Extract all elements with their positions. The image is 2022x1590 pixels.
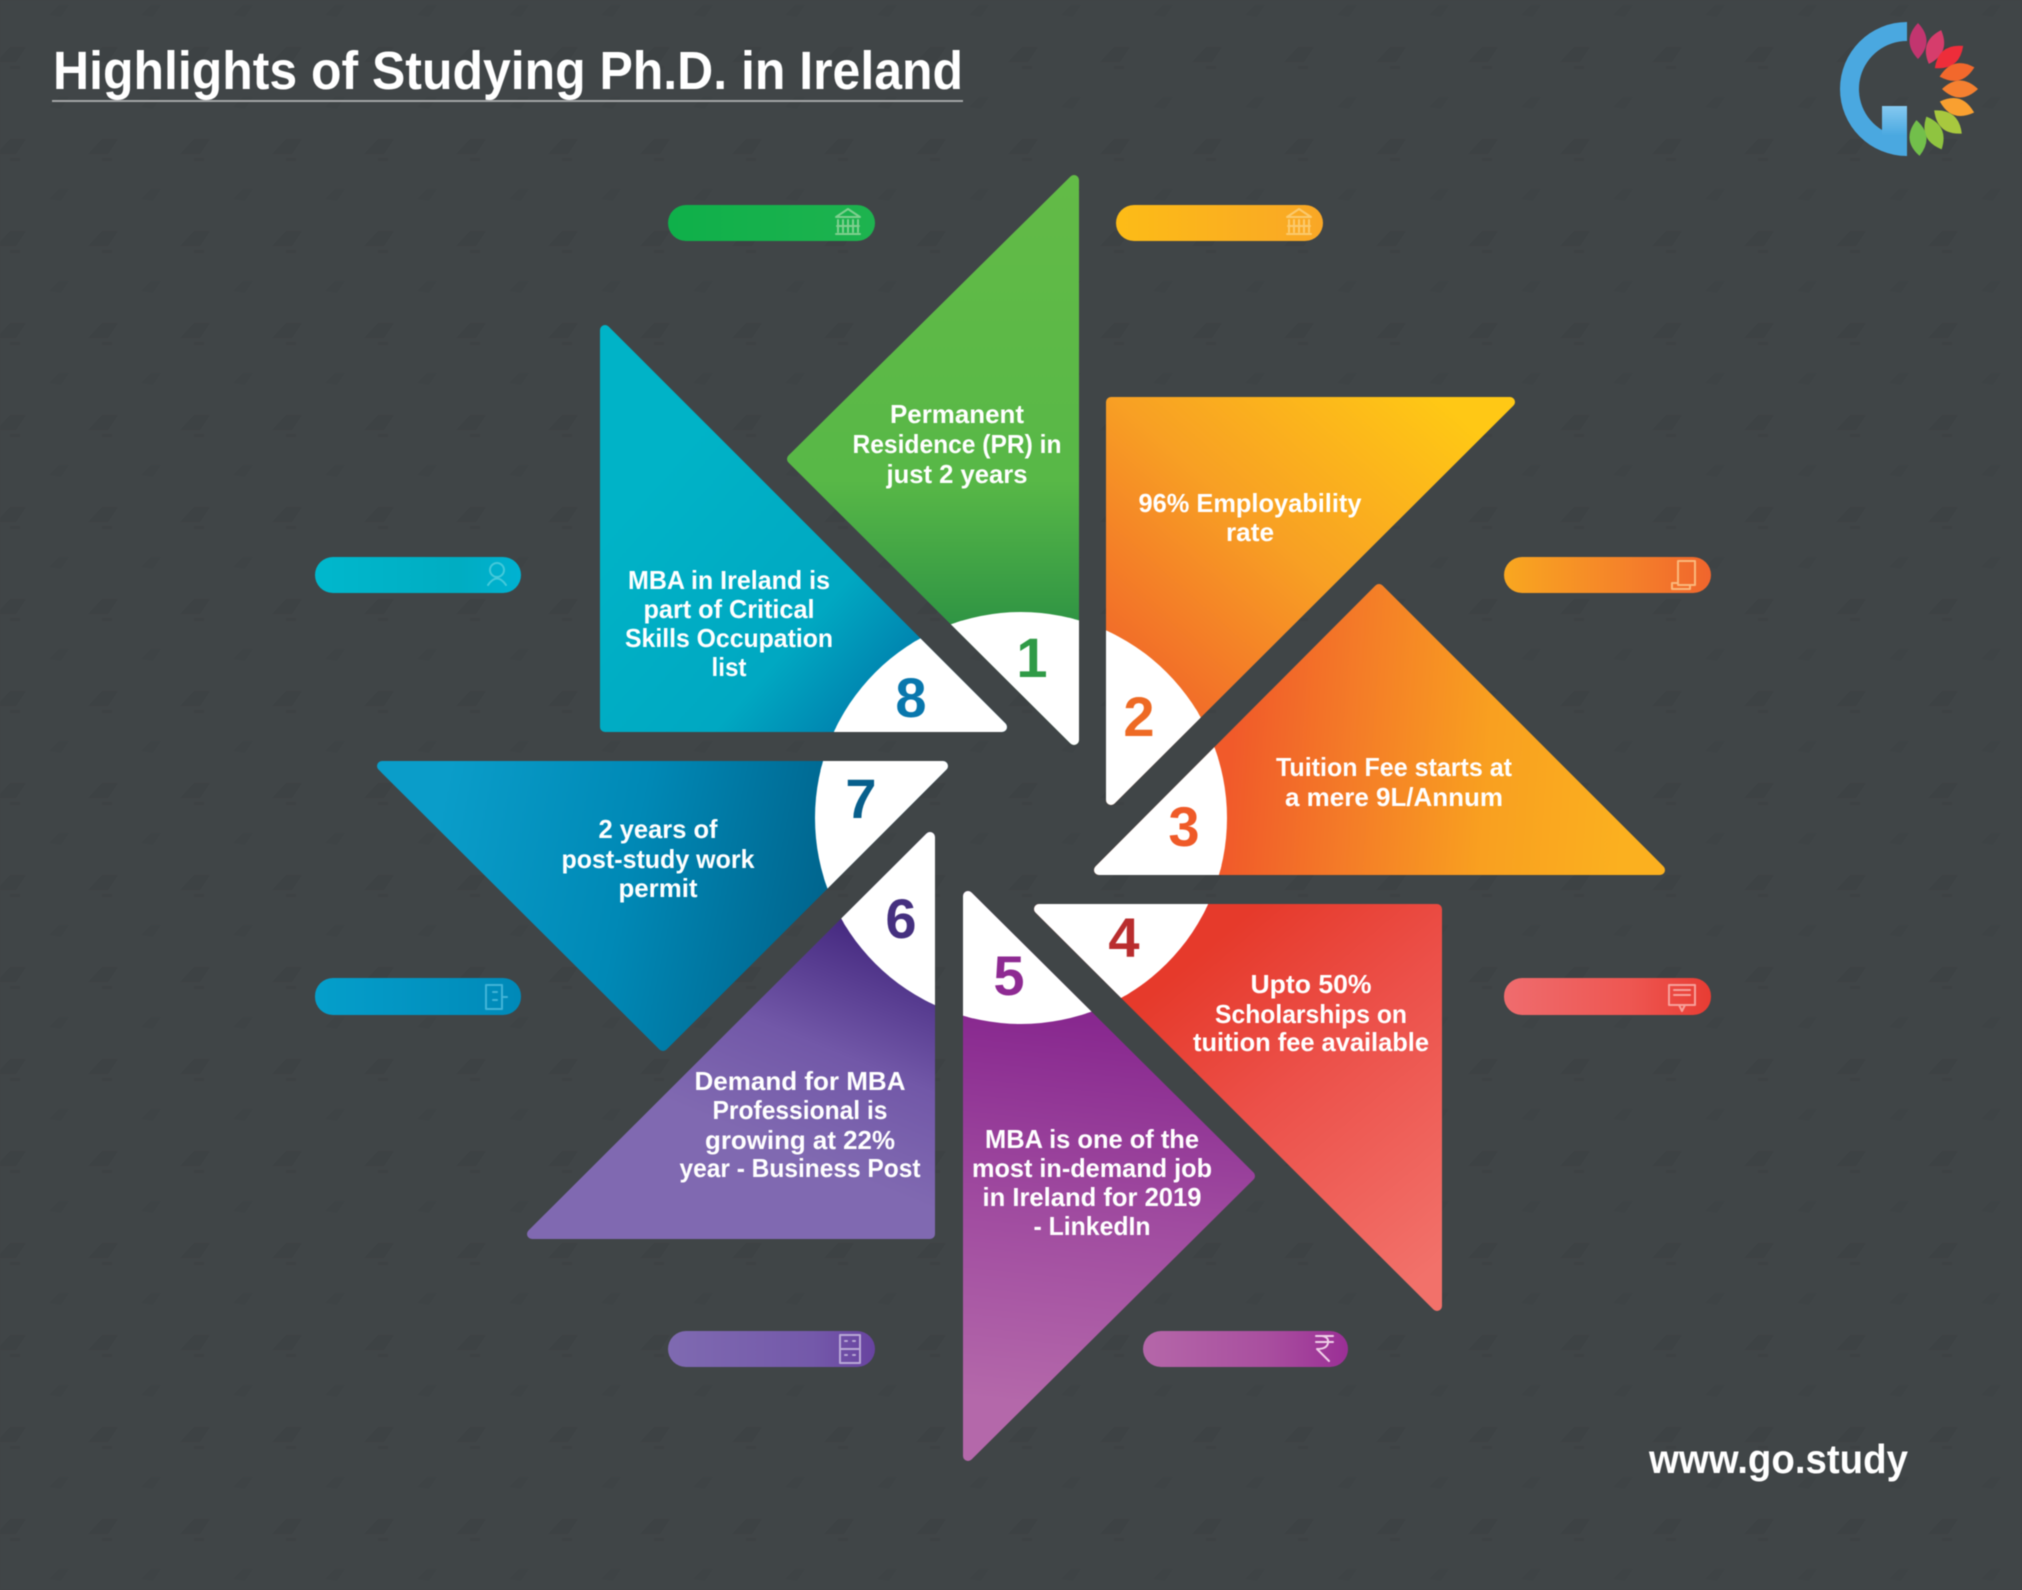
panel: 4 scholarships: Scholarships on: [1215, 999, 1407, 1029]
panel: 4 scholarships: [1039, 906, 1437, 1306]
panel: 6 demand for MBA: [532, 837, 930, 1234]
panel: 5 in-demand job: in Ireland for 2019: [982, 1182, 1202, 1212]
panel: 1 permanent residence: just 2 years: [886, 459, 1028, 489]
panel: 8 critical skills: part of Critical: [644, 594, 814, 624]
panel: 7 work permit: post-study work: [562, 844, 755, 874]
panel: 2 employability: [1111, 402, 1510, 800]
panel: 3 tuition fee: Tuition Fee starts at: [1276, 752, 1512, 782]
panel: 6 demand for MBA: Professional is: [712, 1095, 888, 1125]
panel: 1 permanent residence: [792, 180, 1074, 740]
panel: 3 tuition fee: a mere 9L/Annum: [1285, 782, 1503, 812]
panel: 6 demand for MBA: 6: [885, 887, 917, 950]
panel: 8 critical skills: list: [712, 652, 747, 682]
pill: yellow with building icon: [1116, 205, 1323, 241]
panel: 5 in-demand job: most in-demand job: [972, 1153, 1212, 1183]
pill: green with building icon: [668, 205, 875, 241]
website url: www.go.study: [1648, 1436, 1908, 1482]
logo: [1840, 22, 1978, 157]
pill: pink with rupee icon: [1143, 1331, 1348, 1367]
panel: 8 critical skills: [605, 330, 1002, 729]
panel: 6 demand for MBA: growing at 22%: [705, 1125, 895, 1155]
panel: 5 in-demand job: 5: [993, 944, 1025, 1007]
pill: red with certificate icon: [1504, 978, 1711, 1015]
panel: 1 permanent residence: Permanent: [890, 399, 1024, 429]
panel: 5 in-demand job: MBA is one of the: [985, 1124, 1199, 1154]
pill: purple with calculator icon: [668, 1331, 875, 1367]
panel: 7 work permit: [382, 766, 943, 1046]
panel: 8 critical skills: Skills Occupation: [625, 623, 833, 653]
panel: 6 demand for MBA: Demand for MBA: [694, 1066, 906, 1096]
pill: blue with form icon: [315, 978, 521, 1015]
panel: 5 in-demand job: [968, 896, 1250, 1456]
panel: 1 permanent residence: Residence (PR) in: [852, 429, 1062, 459]
panel: 4 scholarships: Upto 50%: [1250, 969, 1372, 999]
panel: 7 work permit: 2 years of: [598, 814, 718, 844]
panel: 4 scholarships: 4: [1108, 906, 1140, 969]
panel: 8 critical skills: 8: [895, 666, 927, 729]
panel: 8 critical skills: MBA in Ireland is: [628, 565, 830, 595]
panel: 7 work permit: permit: [618, 873, 698, 903]
panel: 2 employability: rate: [1226, 517, 1274, 547]
panel: 4 scholarships: tuition fee available: [1193, 1027, 1429, 1057]
panel: 3 tuition fee: 3: [1168, 795, 1200, 858]
panel: 6 demand for MBA: year - Business Post: [680, 1153, 921, 1183]
panel: 2 employability: 2: [1123, 685, 1155, 748]
panel: 1 permanent residence: 1: [1016, 626, 1048, 689]
panel: 2 employability: 96% Employability: [1138, 488, 1362, 518]
panel: 3 tuition fee: [1099, 589, 1660, 870]
panel: 5 in-demand job: - LinkedIn: [1034, 1211, 1150, 1241]
pill: teal with person icon: [315, 557, 521, 593]
panel: 7 work permit: 7: [845, 767, 877, 830]
title: Highlights of Studying Ph.D. in Ireland: [53, 41, 963, 101]
pill: orange with document icon: [1504, 557, 1711, 593]
